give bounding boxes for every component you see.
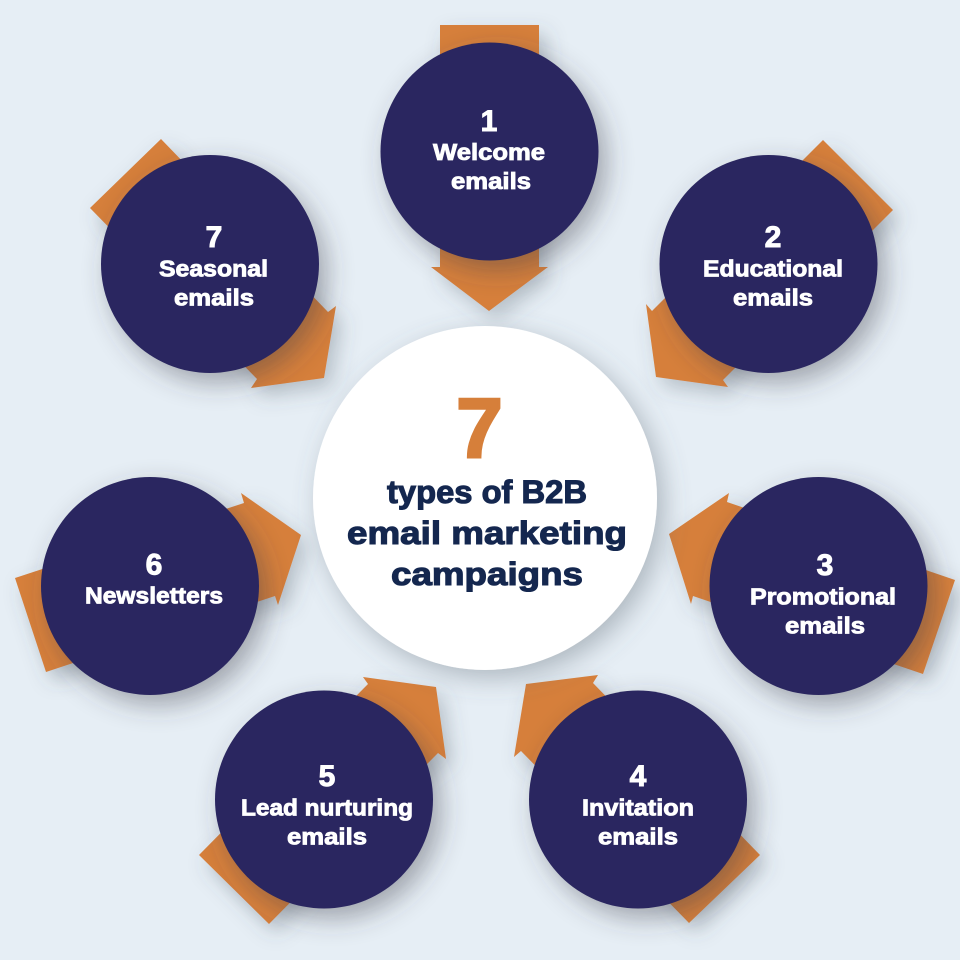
- panel: step 1 Welcome emails: [380, 25, 598, 311]
- label: emails: emails: [598, 824, 678, 850]
- label: Educational: Educational: [703, 256, 843, 282]
- number: 3: 3: [817, 549, 833, 582]
- arrow: step 4: [514, 675, 760, 923]
- arrow: step 2: [646, 140, 893, 387]
- label: Invitation: Invitation: [582, 794, 694, 820]
- number: 7: 7: [206, 221, 222, 254]
- panel: step 5 Lead nurturing emails: [199, 677, 446, 924]
- circle: step 2: [660, 155, 878, 373]
- number: 6: 6: [146, 548, 162, 582]
- panel: step 4 Invitation emails: [514, 675, 760, 923]
- label: Seasonal: Seasonal: [159, 256, 268, 282]
- circle: step 5: [215, 690, 433, 908]
- heading line: email marketing: email marketing: [347, 515, 627, 551]
- circle: step 4: [529, 690, 747, 908]
- number: 1: 1: [481, 105, 497, 138]
- arrow: step 7: [90, 139, 336, 388]
- label: Lead nurturing: Lead nurturing: [241, 794, 413, 820]
- panel: step 7 Seasonal emails: [90, 139, 336, 388]
- heading line: types of B2B: types of B2B: [387, 474, 587, 510]
- panel: step 2 Educational emails: [646, 140, 893, 387]
- label: emails: emails: [174, 284, 254, 310]
- circle: step 7: [101, 155, 319, 373]
- label: Welcome: Welcome: [433, 139, 545, 165]
- label: emails: emails: [733, 284, 813, 310]
- circle: central white disc: [313, 326, 657, 670]
- arrow: step 6: [15, 493, 301, 672]
- label: Promotional: Promotional: [750, 584, 896, 610]
- arrow: step 3: [669, 493, 955, 674]
- number: 2: 2: [765, 221, 781, 254]
- big number 7: 7: [456, 381, 503, 475]
- label: emails: emails: [451, 168, 531, 194]
- label: emails: emails: [287, 824, 367, 850]
- circle: step 6: [41, 477, 259, 695]
- panel: step 3 Promotional emails: [669, 477, 955, 695]
- heading line: campaigns: campaigns: [391, 556, 583, 592]
- number: 4: 4: [630, 760, 647, 793]
- label: emails: emails: [785, 612, 865, 638]
- label: Newsletters: Newsletters: [85, 582, 223, 608]
- number: 5: 5: [319, 760, 335, 793]
- panel: step 6 Newsletters: [15, 477, 301, 695]
- panel: central title: [313, 326, 657, 670]
- circle: step 1: [380, 42, 598, 260]
- arrow: step 1: [431, 25, 548, 311]
- arrow: step 5: [199, 677, 446, 924]
- circle: step 3: [710, 477, 928, 695]
